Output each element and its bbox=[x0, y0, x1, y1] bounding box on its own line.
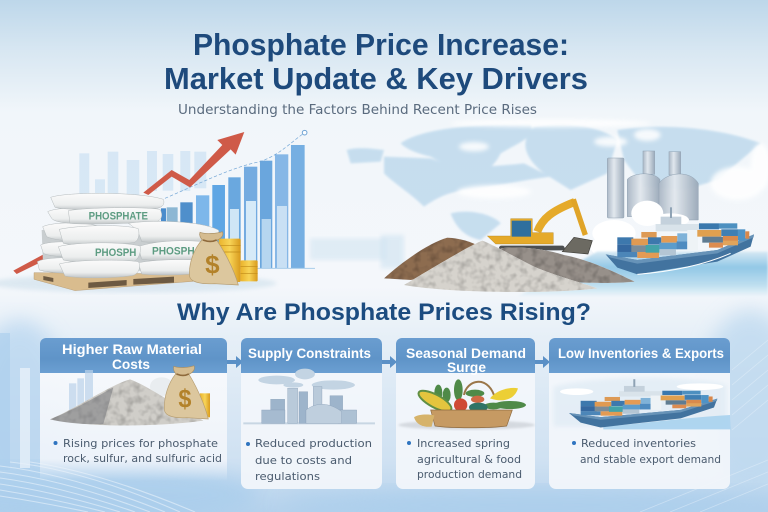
bullet text: Reduced inventories bbox=[581, 437, 696, 450]
dashed trend line bbox=[165, 130, 307, 198]
card heading: Surge bbox=[447, 360, 486, 375]
bullet text bbox=[246, 437, 372, 483]
world map bbox=[347, 124, 761, 240]
sea bbox=[517, 252, 768, 297]
bullet text: and stable export demand bbox=[580, 453, 721, 466]
card heading: Low Inventories & Exports bbox=[558, 346, 724, 361]
sack labels: PHOSPHATE bbox=[89, 210, 148, 222]
card heading: Costs bbox=[112, 357, 150, 372]
sack labels: PHOSPH bbox=[95, 247, 136, 259]
money bag bbox=[189, 232, 238, 285]
panel: seasonal demand surge bbox=[396, 338, 535, 489]
title: Phosphate Price Increase: bbox=[193, 28, 569, 62]
hero illustration: world map, mining and shipping bbox=[347, 119, 768, 297]
card heading: Higher Raw Material bbox=[62, 342, 202, 357]
bullet text: regulations bbox=[255, 470, 320, 483]
factory silos bbox=[607, 151, 698, 220]
bullet text bbox=[407, 437, 522, 481]
red rising arrow bbox=[13, 132, 244, 274]
rock piles bbox=[384, 238, 635, 292]
cargo ship bbox=[606, 207, 754, 274]
faded background bars bbox=[79, 151, 206, 197]
phosphate sacks bbox=[37, 193, 219, 278]
bullet text: production demand bbox=[417, 468, 522, 481]
bullet text: due to costs and bbox=[255, 454, 352, 467]
illustration: rock pile and money bag bbox=[50, 366, 210, 426]
title: Market Update & Key Drivers bbox=[164, 62, 588, 96]
arrow: card 1 to 2 bbox=[227, 356, 243, 368]
panel: supply constraints bbox=[241, 338, 382, 489]
title bbox=[164, 28, 588, 96]
bullet text: rock, sulfur, and sulfuric acid bbox=[63, 452, 222, 465]
subtitle: Understanding the Factors Behind Recent Price Rises bbox=[178, 103, 537, 118]
illustration: food basket bbox=[398, 379, 535, 430]
illustration: factory bbox=[243, 369, 375, 423]
sack labels: PHOSPHA bbox=[152, 245, 202, 257]
gold coins bbox=[219, 239, 258, 282]
bullet text: agricultural & food bbox=[417, 453, 521, 466]
ground haze and water bbox=[0, 238, 387, 293]
bullet text bbox=[572, 437, 721, 466]
section heading: Why Are Phosphate Prices Rising? bbox=[177, 299, 591, 326]
illustration: cargo ship bbox=[553, 378, 731, 429]
bullet text: Reduced production bbox=[255, 437, 372, 450]
card heading bbox=[62, 342, 202, 372]
excavator bbox=[487, 199, 592, 254]
bar chart bbox=[160, 145, 315, 268]
bullet text: Increased spring bbox=[417, 437, 510, 450]
pallet bbox=[34, 273, 193, 291]
sack labels bbox=[89, 210, 202, 259]
panel: low inventories and exports bbox=[549, 338, 731, 489]
bullet text bbox=[54, 437, 222, 465]
panel: higher raw material costs bbox=[40, 338, 227, 481]
arrow: card 2 to 3 bbox=[382, 356, 397, 368]
bullet text: Rising prices for phosphate bbox=[63, 437, 218, 450]
arrow: card 3 to 4 bbox=[535, 356, 550, 368]
card heading: Supply Constraints bbox=[248, 346, 371, 361]
hero illustration: price chart and phosphate sacks bbox=[0, 130, 387, 293]
steam clouds bbox=[591, 201, 689, 257]
card heading bbox=[406, 346, 526, 375]
card heading: Seasonal Demand bbox=[406, 346, 526, 361]
